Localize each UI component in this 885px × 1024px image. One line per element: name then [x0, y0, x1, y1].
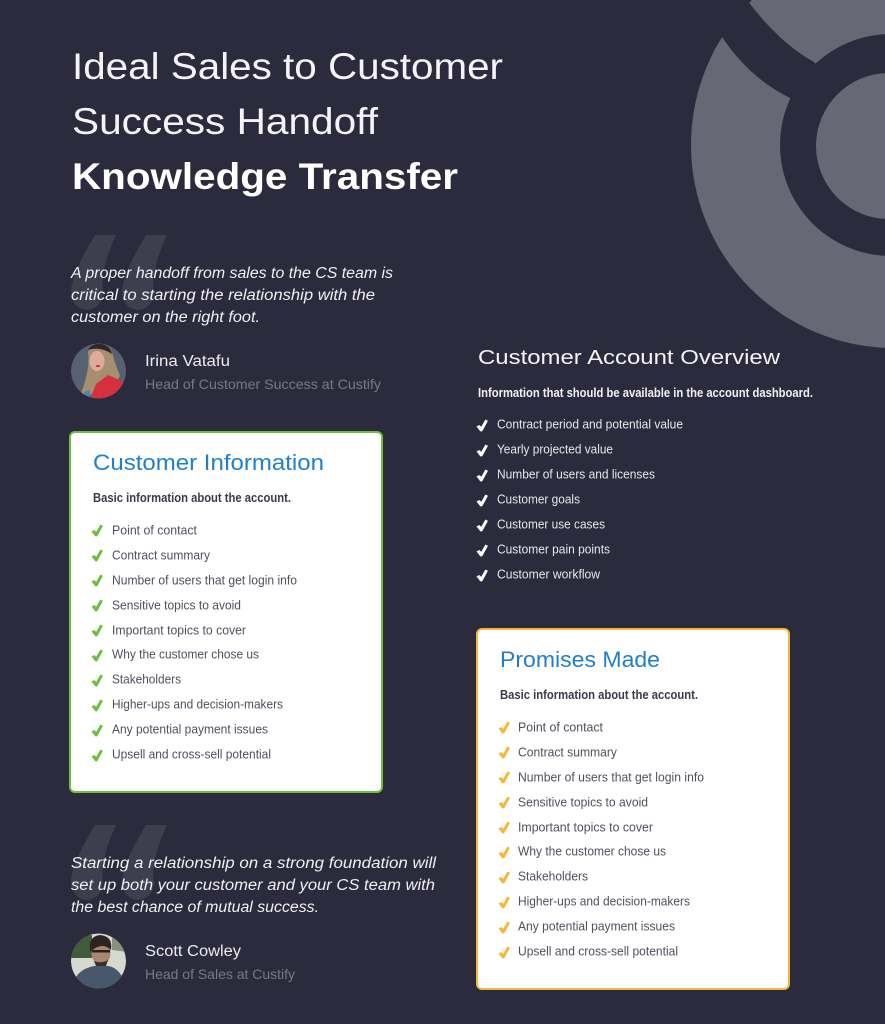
quote text: customer on the right foot. [71, 309, 260, 326]
title [72, 45, 503, 197]
quote text [70, 265, 393, 326]
quote text: the best chance of mutual success. [71, 899, 319, 916]
decorative logo graphic [680, 0, 885, 348]
title: Ideal Sales to Customer [72, 45, 503, 87]
avatar: Irina Vatafu [71, 344, 126, 399]
checklist: Point of contact [518, 719, 603, 734]
quote text: critical to starting the relationship with the [71, 287, 375, 304]
checklist: Any potential payment issues [112, 721, 268, 736]
checklist: Sensitive topics to avoid [112, 597, 241, 612]
checklist: Yearly projected value [497, 441, 613, 456]
checklist: Contract summary [112, 547, 210, 562]
checklist [477, 416, 683, 581]
checklist: Customer use cases [497, 516, 605, 531]
heading: Customer Information [93, 450, 324, 475]
checklist [92, 522, 297, 761]
avatar: Scott Cowley [70, 934, 128, 989]
panel: customer information [70, 432, 382, 792]
quote text [71, 855, 437, 916]
checklist: Higher-ups and decision-makers [518, 893, 690, 908]
checklist: Why the customer chose us [112, 646, 259, 661]
checklist: Customer pain points [497, 541, 610, 556]
checklist: Number of users that get login info [518, 769, 704, 784]
checklist: Contract summary [518, 744, 617, 759]
attribution: Scott Cowley [145, 943, 241, 960]
quote block: Scott Cowley [70, 825, 437, 989]
subheading: Basic information about the account. [93, 490, 291, 505]
checklist: Number of users that get login info [112, 572, 297, 587]
checklist: Stakeholders [112, 671, 181, 686]
subheading: Basic information about the account. [500, 687, 698, 702]
checklist: Upsell and cross-sell potential [112, 746, 271, 761]
icon: quotation mark [71, 235, 167, 310]
attribution [145, 943, 295, 982]
checklist: Important topics to cover [518, 819, 654, 834]
heading: Promises Made [500, 647, 660, 672]
checklist: Customer workflow [497, 566, 601, 581]
quote text: A proper handoff from sales to the CS team is [70, 265, 393, 282]
checklist: Point of contact [112, 522, 197, 537]
icon: quotation mark [71, 825, 167, 900]
checklist: Customer goals [497, 491, 580, 506]
checklist: Contract period and potential value [497, 416, 683, 431]
checklist: Higher-ups and decision-makers [112, 696, 283, 711]
checklist: Upsell and cross-sell potential [518, 943, 678, 958]
quote text: Starting a relationship on a strong foundation will [71, 855, 437, 872]
checklist: Number of users and licenses [497, 466, 655, 481]
panel: promises made [477, 629, 789, 989]
title: Knowledge Transfer [72, 155, 458, 197]
quote text: set up both your customer and your CS team with [71, 877, 435, 894]
attribution [145, 353, 381, 392]
attribution: Head of Customer Success at Custify [145, 376, 381, 392]
attribution: Irina Vatafu [145, 353, 230, 370]
checklist [499, 719, 704, 958]
attribution: Head of Sales at Custify [145, 966, 295, 982]
quote block: Irina Vatafu [70, 235, 393, 399]
panel: customer account overview [477, 346, 813, 581]
checklist: Sensitive topics to avoid [518, 794, 648, 809]
title: Success Handoff [72, 100, 379, 142]
checklist: Important topics to cover [112, 622, 247, 637]
checklist: Stakeholders [518, 868, 588, 883]
subheading: Information that should be available in the account dashboard. [478, 385, 813, 400]
checklist: Any potential payment issues [518, 918, 675, 933]
checklist: Why the customer chose us [518, 843, 666, 858]
heading: Customer Account Overview [478, 346, 780, 369]
